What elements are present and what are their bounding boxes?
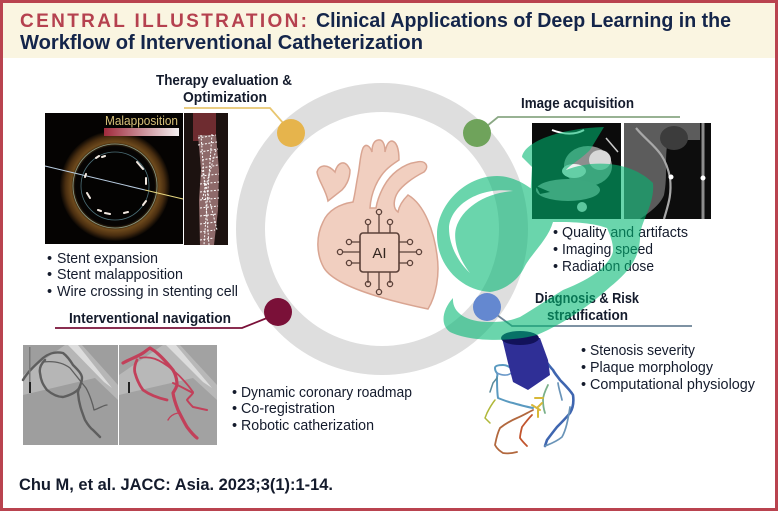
list: diagnosis: •	[581, 343, 586, 359]
title: CENTRAL ILLUSTRATION:	[20, 11, 307, 32]
title: Workflow of Interventional Catheterization	[20, 32, 423, 54]
node: diagnosis	[473, 293, 501, 321]
angiogram with roadmap	[119, 345, 217, 445]
heading: therapy evaluation: Optimization	[183, 89, 267, 106]
connector: diagnosis	[497, 315, 692, 326]
list: therapy: •	[47, 284, 52, 300]
list: therapy: Stent expansion	[57, 251, 158, 267]
connector: acquisition	[487, 117, 680, 126]
list: diagnosis	[581, 343, 756, 393]
list: acquisition: •	[553, 259, 558, 275]
header band	[3, 3, 775, 58]
list: navigation: •	[232, 418, 237, 434]
list: therapy: Wire crossing in stenting cell	[57, 284, 238, 300]
list: diagnosis: •	[581, 377, 586, 393]
green swirl overlay	[437, 127, 653, 340]
list: therapy: •	[47, 267, 52, 283]
connector: navigation	[55, 316, 272, 328]
central ring	[250, 98, 514, 360]
connector: therapy	[184, 108, 284, 124]
CT image curved reformat	[624, 123, 711, 219]
heading: diagnosis: Diagnosis & Risk	[535, 290, 640, 307]
node: therapy	[277, 119, 305, 147]
list: therapy: •	[47, 251, 52, 267]
heading: interventional navigation: Interventional navigation	[69, 310, 231, 327]
node: navigation	[264, 298, 292, 326]
list: diagnosis: •	[581, 360, 586, 376]
list: therapy: Stent malapposition	[57, 267, 183, 283]
list: acquisition: •	[553, 242, 558, 258]
list: diagnosis: Stenosis severity	[590, 343, 696, 359]
list: acquisition: Radiation dose	[562, 259, 654, 275]
heading: therapy evaluation	[156, 72, 292, 106]
title: Clinical Applications of Deep Learning in the	[316, 10, 731, 32]
node: acquisition	[463, 119, 491, 147]
CT image axial	[532, 123, 621, 219]
list: acquisition: •	[553, 225, 558, 241]
citation: Chu M, et al. JACC: Asia. 2023;3(1):1-14.	[19, 476, 333, 494]
icon: heart with AI chip	[317, 140, 438, 309]
list: navigation: •	[232, 401, 237, 417]
title	[20, 10, 731, 54]
list: acquisition: Quality and artifacts	[562, 225, 688, 241]
list: acquisition: Imaging speed	[562, 242, 653, 258]
stent longitudinal image	[184, 113, 228, 245]
list: diagnosis: Computational physiology	[590, 377, 756, 393]
OCT image: Malapposition	[105, 113, 178, 128]
list: navigation: Robotic catherization	[241, 418, 374, 434]
heading: image acquisition: Image acquisition	[521, 95, 634, 112]
OCT image	[45, 113, 183, 244]
icon: heart with AI chip: AI	[372, 245, 387, 262]
list: acquisition	[553, 225, 688, 275]
list: therapy	[47, 251, 238, 300]
angiogram before	[23, 345, 118, 445]
3D coronary tree	[485, 331, 573, 453]
list: navigation: Co-registration	[241, 401, 335, 417]
heading: therapy evaluation: Therapy evaluation &	[156, 72, 292, 89]
list: diagnosis: Plaque morphology	[590, 360, 714, 376]
list: navigation: Dynamic coronary roadmap	[241, 385, 412, 401]
list: navigation	[232, 385, 412, 434]
heading: diagnosis	[535, 290, 640, 324]
list: navigation: •	[232, 385, 237, 401]
heading: diagnosis: stratification	[547, 307, 628, 324]
